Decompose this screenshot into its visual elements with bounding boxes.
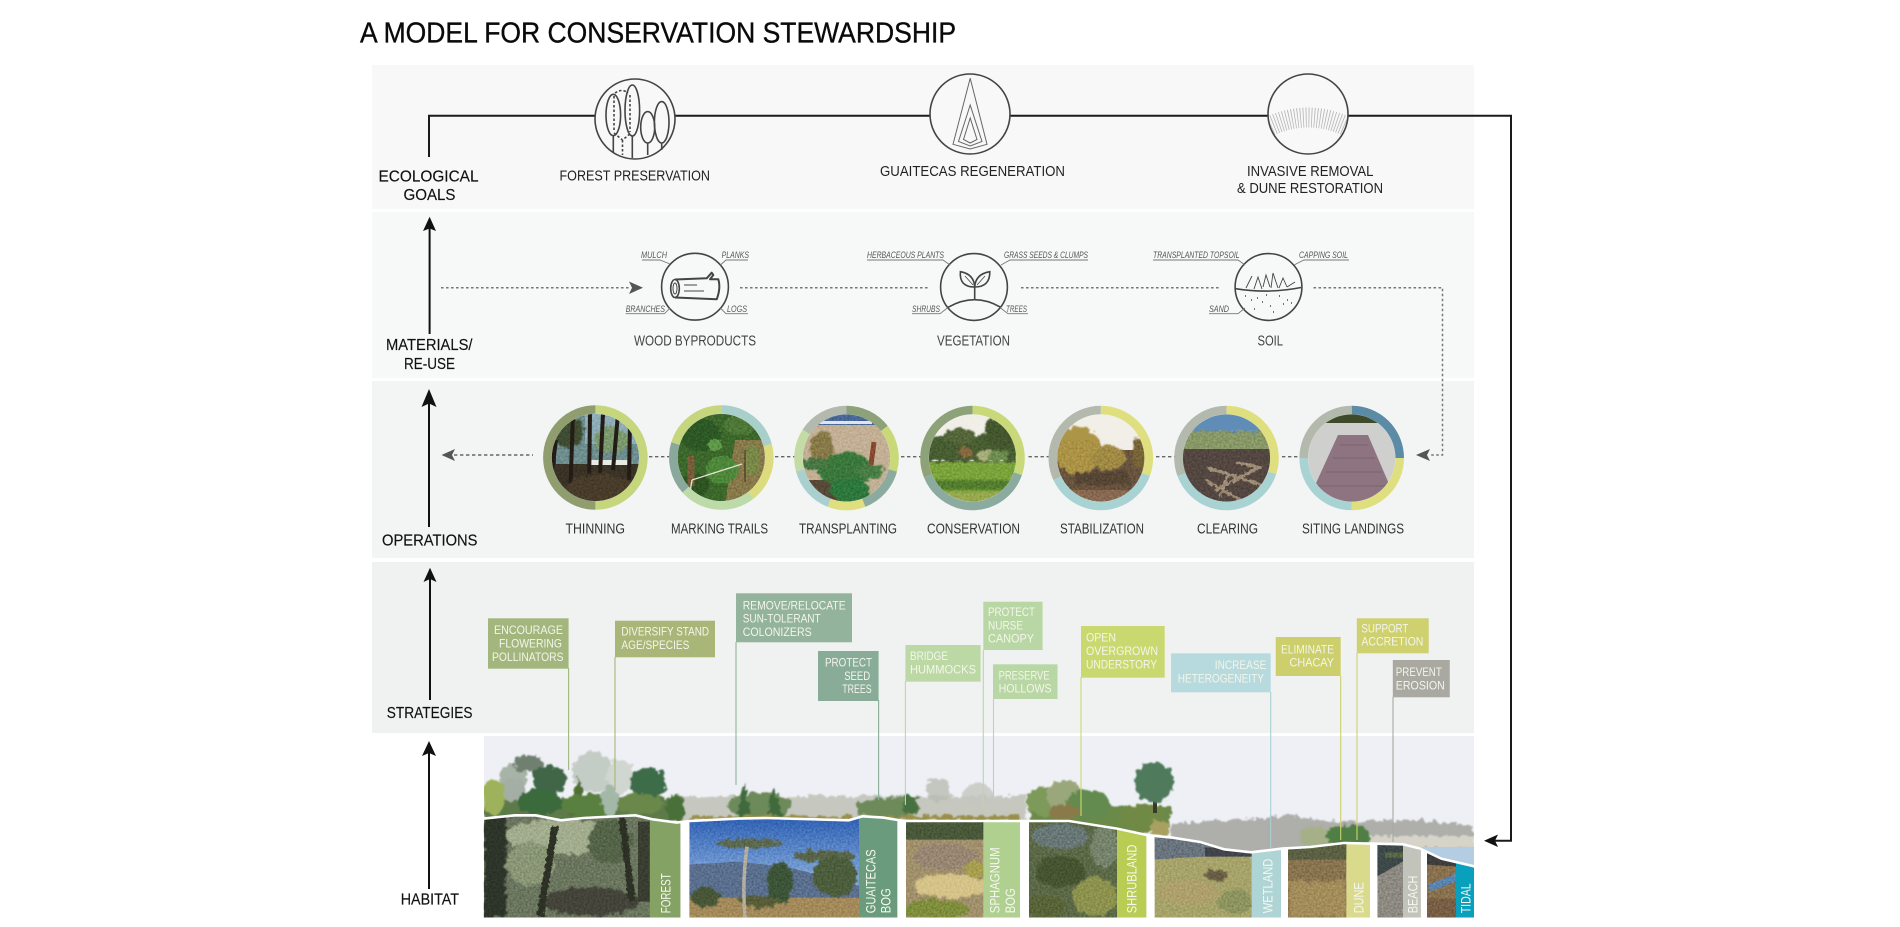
strategy: protect seed trees: PROTECT	[825, 656, 873, 670]
label: guaitecas regeneration: GUAITECAS REGENERATION	[880, 163, 1065, 180]
label: guaitecas bog	[859, 812, 897, 918]
habitat: wetland	[1154, 832, 1253, 918]
row label: ecological goals: GOALS	[404, 187, 456, 204]
material callouts: vegetation: SHRUBS	[912, 304, 940, 314]
label: wood byproducts: WOOD BYPRODUCTS	[634, 334, 756, 350]
label: wetland	[1252, 850, 1281, 918]
habitat panorama	[483, 736, 1474, 869]
label: guaitecas bog: BOG	[878, 888, 894, 913]
label: dune	[1346, 844, 1370, 918]
material callouts: soil: SAND	[1209, 304, 1229, 314]
arrow: out of operations	[442, 449, 455, 461]
icon: vegetation	[941, 254, 1007, 320]
strategy: protect nurse canopy: CANOPY	[988, 632, 1034, 646]
label: siting landings: SITING LANDINGS	[1302, 521, 1404, 537]
label: sphagnum bog: SPHAGNUM	[988, 847, 1002, 913]
strategy: protect seed trees	[818, 651, 879, 701]
operation: clearing	[1174, 406, 1279, 510]
row label: habitat: HABITAT	[401, 891, 459, 908]
habitat: shrubland	[1027, 817, 1119, 918]
strategy: protect seed trees: TREES	[842, 682, 872, 696]
label: transplanting: TRANSPLANTING	[799, 521, 897, 537]
label: dune: DUNE	[1352, 882, 1366, 913]
label: forest	[650, 812, 680, 918]
label: soil: SOIL	[1258, 334, 1283, 350]
strategy: increase heterogeneity: INCREASE	[1215, 658, 1266, 672]
icon: wood byproducts	[662, 253, 728, 320]
label: shrubland	[1117, 830, 1146, 918]
arrow: operations to materials	[422, 389, 436, 527]
panel: materials and re-use	[372, 212, 1474, 378]
icon: soil	[1235, 254, 1302, 320]
icon: forest preservation	[595, 79, 675, 159]
white gaps between photos	[680, 812, 1427, 918]
strategy: preserve hollows: HOLLOWS	[999, 682, 1052, 696]
label: sphagnum bog: BOG	[1003, 888, 1018, 913]
label: tidal: TIDAL	[1458, 883, 1474, 913]
material callouts: wood: BRANCHES	[626, 304, 665, 314]
label: thinning: THINNING	[566, 521, 625, 537]
habitat photo strips	[484, 812, 1474, 920]
row label: materials re-use	[386, 337, 473, 373]
material callouts: soil	[1153, 250, 1349, 314]
row label: materials re-use: RE-USE	[404, 356, 455, 373]
icon: invasive removal and dune restoration	[1268, 74, 1348, 154]
label: guaitecas bog: GUAITECAS	[864, 849, 878, 913]
operation: stabilization	[1048, 406, 1154, 510]
panorama: shrubland and big tree	[1027, 780, 1170, 836]
white ground cut-out	[484, 815, 1474, 927]
strategy: increase heterogeneity: HETEROGENEITY	[1178, 671, 1264, 685]
strategy: diversify stand age/species	[615, 621, 715, 657]
strategy: remove/relocate sun-tolerant colonizers: COLONIZERS	[743, 625, 812, 639]
panel: operations	[372, 381, 1474, 558]
operation: siting landings	[1304, 410, 1400, 506]
strategy: eliminate chacay: CHACAY	[1290, 656, 1334, 670]
habitat: forest	[484, 812, 650, 918]
row label: operations: OPERATIONS	[382, 532, 478, 550]
panorama: forest canopy	[483, 752, 684, 822]
strategy: preserve hollows	[993, 664, 1058, 699]
strategy: encourage flowering pollinators: FLOWERING	[499, 637, 562, 651]
habitat: dune	[1288, 842, 1346, 918]
strategy: prevent erosion: EROSION	[1396, 678, 1445, 692]
row label: strategies: STRATEGIES	[387, 705, 472, 722]
strategy: support accretion: SUPPORT	[1361, 621, 1409, 635]
strategy: prevent erosion	[1393, 660, 1450, 697]
panorama: dune shrubs	[1300, 825, 1370, 850]
habitat: guaitecas bog	[689, 817, 859, 918]
label: conservation: CONSERVATION	[927, 521, 1020, 537]
label: invasive removal and dune restoration: & DUNE RESTORATION	[1237, 180, 1383, 197]
panorama: distant haze treeline	[676, 778, 1474, 851]
label: forest preservation: FOREST PRESERVATION	[560, 168, 710, 184]
strategy: support accretion	[1357, 618, 1429, 653]
strategy: diversify stand age/species: AGE/SPECIES	[621, 638, 689, 652]
arrow: strategies to operations	[424, 568, 436, 700]
label: clearing: CLEARING	[1197, 521, 1258, 537]
label: beach: BEACH	[1406, 876, 1420, 913]
panel: strategies	[372, 562, 1474, 733]
row label: ecological goals: ECOLOGICAL	[378, 168, 479, 186]
icon: guaitecas regeneration	[930, 74, 1010, 154]
label: marking trails: MARKING TRAILS	[671, 521, 768, 537]
panorama: bog shrubs	[690, 784, 1020, 820]
operation: marking trails	[669, 405, 774, 510]
arrow: into wood byproducts	[629, 282, 643, 294]
label: tidal	[1456, 863, 1474, 918]
habitat: tidal	[1427, 852, 1456, 918]
row label: materials re-use: MATERIALS/	[386, 337, 473, 354]
strategy: bridge hummocks	[905, 645, 981, 682]
title: A MODEL FOR CONSERVATION STEWARDSHIP	[360, 18, 956, 50]
label: stabilization: STABILIZATION	[1060, 521, 1144, 537]
label: sphagnum bog	[983, 812, 1020, 918]
row label: ecological goals	[378, 168, 479, 204]
label: beach	[1403, 846, 1421, 918]
strategy: eliminate chacay: ELIMINATE	[1281, 642, 1334, 656]
material callouts: soil: CAPPING SOIL	[1299, 250, 1348, 260]
feedback line from habitat to ecological goals	[429, 116, 1511, 847]
material callouts: wood: PLANKS	[722, 250, 749, 260]
strategy: bridge hummocks: HUMMOCKS	[910, 662, 976, 676]
strategy: protect nurse canopy: PROTECT	[988, 605, 1036, 619]
label: wetland: WETLAND	[1260, 858, 1275, 913]
strategy: open overgrown understory	[1081, 626, 1165, 678]
strategy leader lines	[569, 642, 1393, 848]
material callouts: vegetation: GRASS SEEDS & CLUMPS	[1004, 250, 1088, 260]
photo grain overlay	[484, 812, 1474, 920]
panorama: tidal water	[1420, 847, 1474, 865]
material callouts: wood: MULCH	[641, 250, 667, 260]
panel: ecological goals	[372, 65, 1474, 209]
strategy: protect nurse canopy: NURSE	[988, 618, 1023, 632]
strategy: increase heterogeneity	[1171, 653, 1271, 692]
strategy: preserve hollows: PRESERVE	[999, 668, 1050, 682]
strategy: open overgrown understory: OVERGROWN	[1086, 644, 1158, 658]
habitat: beach	[1377, 842, 1403, 918]
label: shrubland: SHRUBLAND	[1124, 844, 1139, 913]
strategy: open overgrown understory: OPEN	[1086, 631, 1116, 645]
strategy: remove/relocate sun-tolerant colonizers: SUN-TOLERANT	[743, 612, 821, 626]
material callouts: soil: TRANSPLANTED TOPSOIL	[1153, 250, 1240, 260]
strategy: encourage flowering pollinators: POLLINATORS	[492, 650, 564, 664]
arrow: habitat to strategies	[422, 741, 436, 889]
operation: conservation	[920, 406, 1025, 510]
material callouts: vegetation: HERBACEOUS PLANTS	[867, 250, 944, 260]
habitat: sphagnum bog	[906, 822, 984, 918]
material callouts: vegetation	[867, 250, 1088, 314]
arrow: materials to goals	[423, 217, 436, 334]
materials flow dotted line	[441, 288, 1442, 455]
label: vegetation: VEGETATION	[937, 334, 1010, 350]
strategy: support accretion: ACCRETION	[1361, 635, 1423, 649]
strategy: bridge hummocks: BRIDGE	[910, 649, 948, 663]
operations flow dashes	[454, 455, 1300, 457]
strategy: protect nurse canopy	[983, 602, 1043, 650]
arrow: into siting landings	[1416, 449, 1430, 461]
strategy: remove/relocate sun-tolerant colonizers	[736, 593, 852, 642]
strategy: encourage flowering pollinators: ENCOURAGE	[494, 623, 563, 637]
material callouts: wood: LOGS	[727, 304, 747, 314]
label: invasive removal and dune restoration	[1237, 163, 1383, 197]
material callouts: wood	[626, 250, 749, 314]
label: invasive removal and dune restoration: INVASIVE REMOVAL	[1247, 163, 1374, 180]
strategy: remove/relocate sun-tolerant colonizers: REMOVE/RELOCATE	[743, 598, 846, 612]
material callouts: vegetation: TREES	[1006, 304, 1027, 314]
label: forest: FOREST	[658, 873, 673, 913]
ground line	[484, 815, 1474, 866]
operation: transplanting	[794, 406, 899, 510]
strategy: eliminate chacay	[1276, 637, 1341, 676]
strategy: encourage flowering pollinators	[488, 618, 569, 669]
strategy: open overgrown understory: UNDERSTORY	[1086, 657, 1157, 671]
strategy: prevent erosion: PREVENT	[1396, 665, 1442, 679]
strategy: diversify stand age/species: DIVERSIFY STAND	[621, 625, 709, 639]
strategy: protect seed trees: SEED	[844, 669, 870, 683]
operation: thinning	[547, 410, 643, 506]
